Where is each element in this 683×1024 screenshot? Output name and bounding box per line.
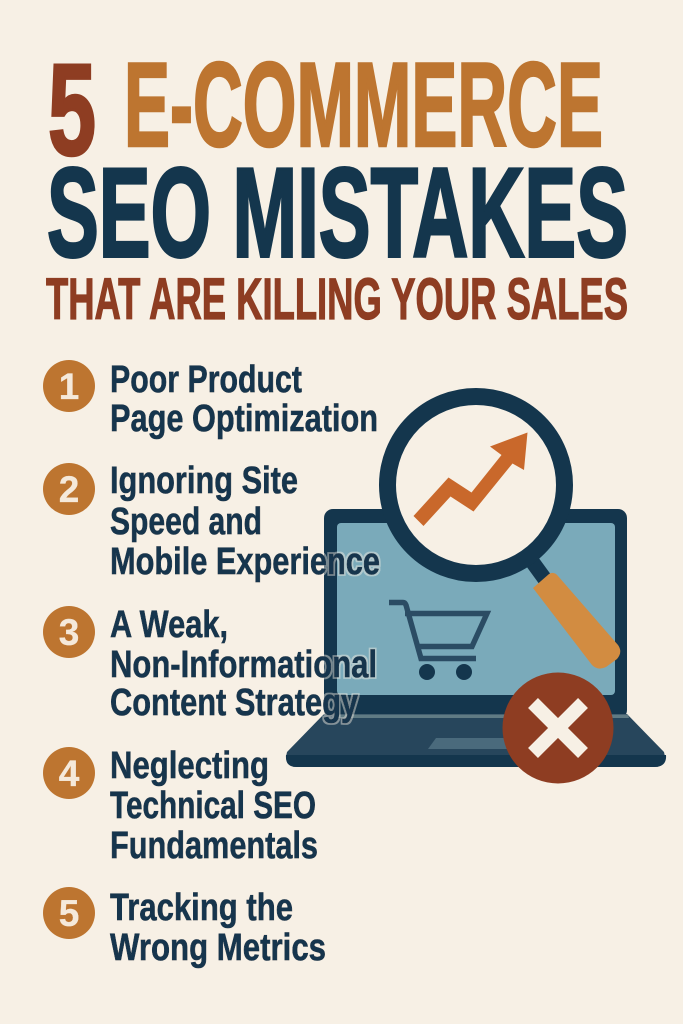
number badge 4: 4: [59, 753, 80, 794]
item 5 text: Wrong Metrics: [110, 927, 326, 969]
item 2 text: Mobile Experience: [110, 541, 380, 583]
illustration: laptop with magnifying glass: [286, 396, 666, 784]
number badge 3: [43, 606, 95, 658]
item 4 text: [110, 745, 318, 867]
item 3 text: Non-Informational: [110, 644, 377, 686]
item 3 text: [110, 604, 377, 724]
item 4 text: Technical SEO: [110, 785, 316, 827]
icon: magnifying glass: [388, 396, 620, 669]
number badge 5: 5: [59, 893, 79, 934]
item 2 text: Speed and: [110, 501, 262, 543]
item 3 text: Content Strategy: [110, 682, 358, 724]
item 3 text: A Weak,: [110, 604, 228, 646]
item 4 text: Neglecting: [110, 745, 269, 787]
title: [46, 36, 628, 332]
item 5 text: [110, 887, 326, 969]
list item 3: [43, 604, 377, 724]
item 2 text: [110, 460, 380, 583]
laptop base: [286, 714, 666, 767]
item 4 text: Fundamentals: [110, 825, 318, 867]
number badge 2: [43, 463, 95, 515]
item 1 text: [110, 359, 378, 440]
number badge 1: [43, 360, 95, 412]
item 2 text: Ignoring Site: [110, 460, 298, 502]
title line 1: number five: 5: [48, 36, 96, 182]
icon: shopping cart: [389, 602, 487, 680]
number badge 1: 1: [59, 366, 79, 407]
list item 5: [43, 887, 326, 969]
number badge 4: [43, 747, 95, 799]
item 5 text: Tracking the: [110, 887, 293, 929]
list item 2: [43, 460, 380, 583]
list item 1: [43, 359, 378, 440]
icon: rising arrow: [414, 432, 528, 526]
icon: red error badge with X: [502, 672, 614, 784]
item 1 text: Poor Product: [110, 359, 302, 401]
laptop screen: [324, 509, 627, 719]
number badge 3: 3: [59, 612, 79, 653]
number badge 5: [43, 887, 95, 939]
number badge 2: 2: [59, 469, 79, 510]
list item 4: [43, 745, 318, 867]
item 1 text: Page Optimization: [110, 398, 378, 440]
